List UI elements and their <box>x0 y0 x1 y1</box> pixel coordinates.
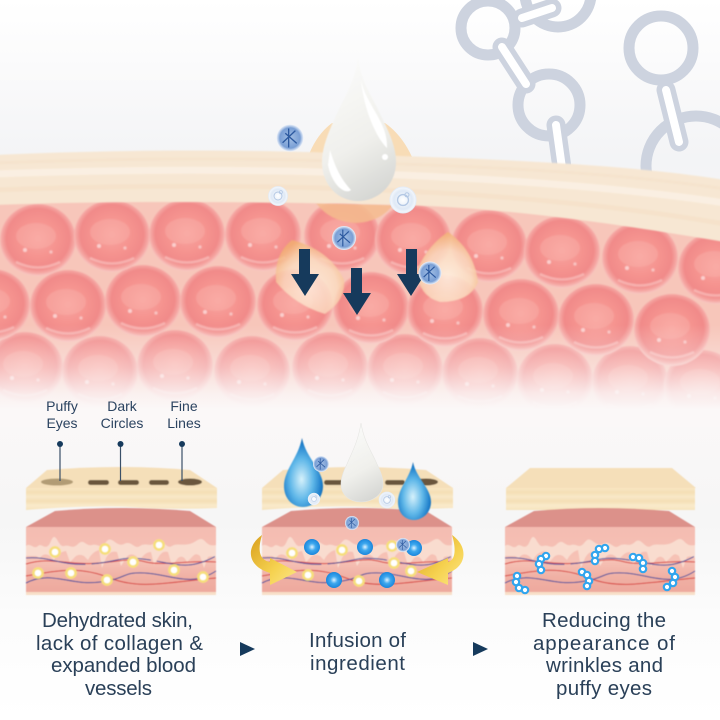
caption: reducing wrinkles: wrinkles and <box>545 654 663 677</box>
active-ingredient bubbles <box>268 124 442 284</box>
pin: puffy eyes <box>57 441 63 481</box>
arrow: step 2 to 3 <box>473 642 488 656</box>
caption: dehydrated skin: vessels <box>85 677 152 700</box>
skin surface band <box>0 151 720 242</box>
caption: infusion of ingredient: ingredient <box>310 652 405 675</box>
label: dark circles: Circles <box>101 415 143 431</box>
label: fine lines: Lines <box>167 415 201 431</box>
label: puffy eyes: Puffy <box>46 398 78 414</box>
white serum drop <box>322 58 396 201</box>
down arrows <box>291 249 425 315</box>
caption: reducing wrinkles: appearance of <box>533 632 675 655</box>
collagen chains <box>513 545 678 593</box>
caption: dehydrated skin: lack of collagen & <box>36 632 203 655</box>
panel: before - dehydrated skin <box>26 398 217 595</box>
panel: after - restored skin <box>505 468 696 595</box>
caption: dehydrated skin: expanded blood <box>51 654 196 677</box>
panel: skin cell layers <box>0 195 720 422</box>
cell row 3 <box>0 330 720 422</box>
blue balls <box>304 539 422 588</box>
golden cells with absorbed ingredient <box>276 203 478 314</box>
cell row 2 <box>0 265 710 366</box>
cell row 1 <box>0 199 720 304</box>
blue water drops <box>284 438 431 520</box>
white drop <box>341 423 383 502</box>
label: fine lines: Fine <box>170 398 198 414</box>
pin: dark circles <box>118 441 124 481</box>
label: dark circles: Dark <box>107 398 138 414</box>
arrow: step 1 to 2 <box>240 642 255 656</box>
fade of cells to white <box>0 325 720 427</box>
molecule chain decoration <box>461 0 720 216</box>
golden halo behind drop <box>308 123 412 164</box>
panel: infusion <box>251 423 464 595</box>
caption: reducing wrinkles: puffy eyes <box>556 677 652 700</box>
caption: infusion of ingredient: Infusion of <box>309 629 406 652</box>
label: puffy eyes: Eyes <box>46 415 78 431</box>
pin: fine lines <box>179 441 185 481</box>
caption: reducing wrinkles: Reducing the <box>542 609 666 632</box>
caption: dehydrated skin: Dehydrated skin, <box>42 609 193 632</box>
bubbles <box>308 456 410 552</box>
gold arrows <box>251 535 464 585</box>
